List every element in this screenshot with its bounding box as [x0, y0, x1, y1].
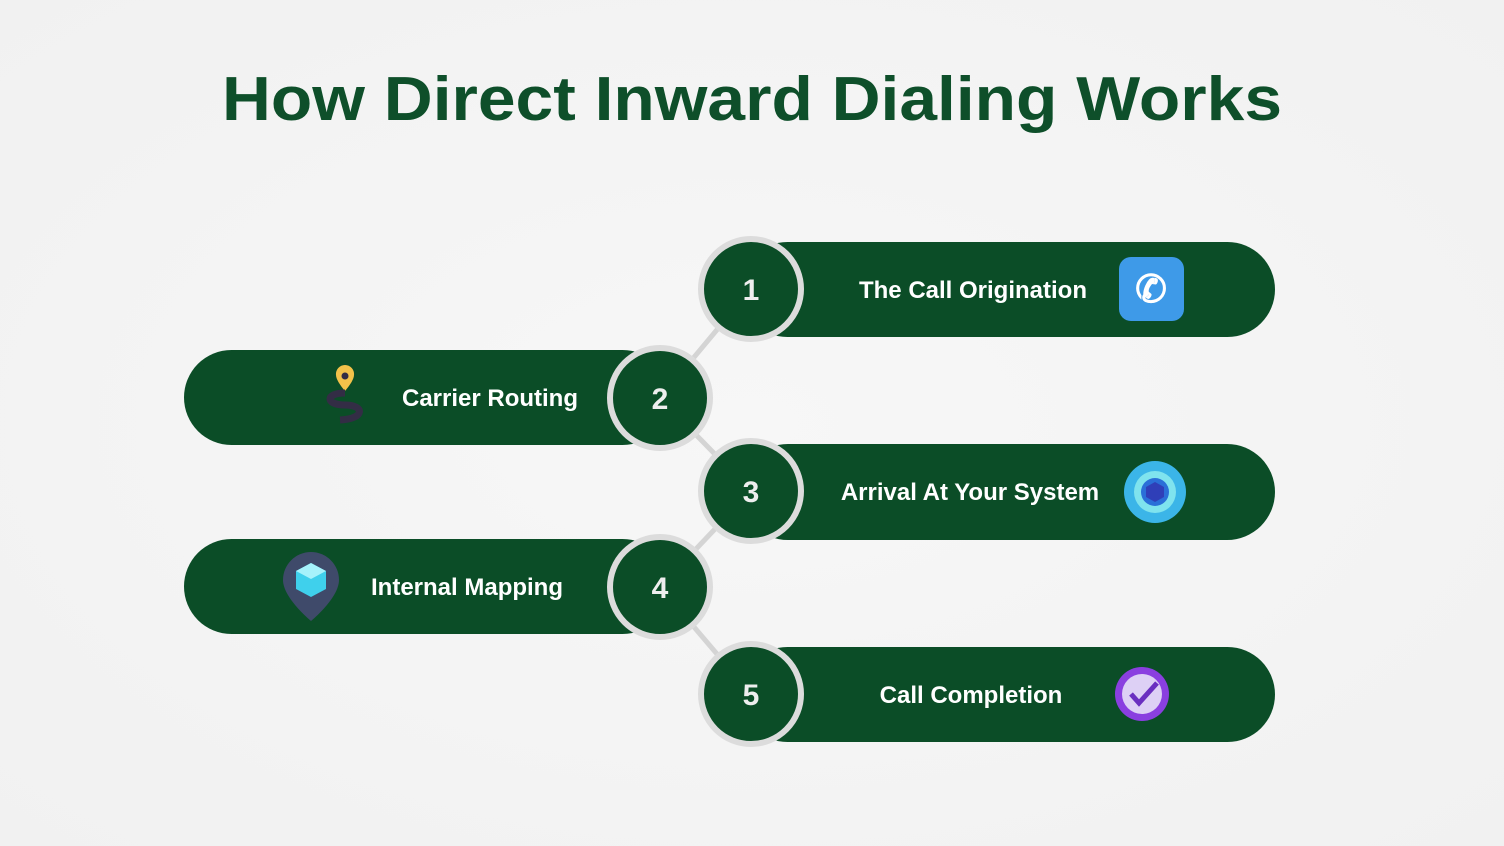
- step 2: Carrier Routing: [402, 385, 578, 412]
- step 4: Internal Mapping: [371, 574, 563, 601]
- icon: check: [1115, 667, 1169, 721]
- icon: phone: ✆: [1135, 269, 1167, 311]
- icon: phone: [1119, 257, 1184, 321]
- step 1: The Call Origination: [859, 277, 1087, 304]
- step 2: [184, 348, 710, 448]
- step 2: 2: [652, 383, 668, 416]
- step 1: [701, 239, 1275, 339]
- title: How Direct Inward Dialing Works: [222, 65, 1282, 134]
- step 3: Arrival At Your System: [841, 479, 1099, 506]
- step 5: Call Completion: [880, 682, 1062, 709]
- icon: gear: [1124, 461, 1186, 523]
- connector lines: [660, 289, 751, 694]
- icon: map pin cube: [283, 552, 339, 621]
- step 4: 4: [652, 572, 669, 605]
- step 3: 3: [743, 476, 759, 509]
- step 5: [701, 644, 1275, 744]
- step 3: [701, 441, 1275, 541]
- step 1: 1: [743, 274, 759, 307]
- icon: route pin: [330, 365, 359, 420]
- step 5: 5: [743, 679, 759, 712]
- step 4: [184, 537, 710, 637]
